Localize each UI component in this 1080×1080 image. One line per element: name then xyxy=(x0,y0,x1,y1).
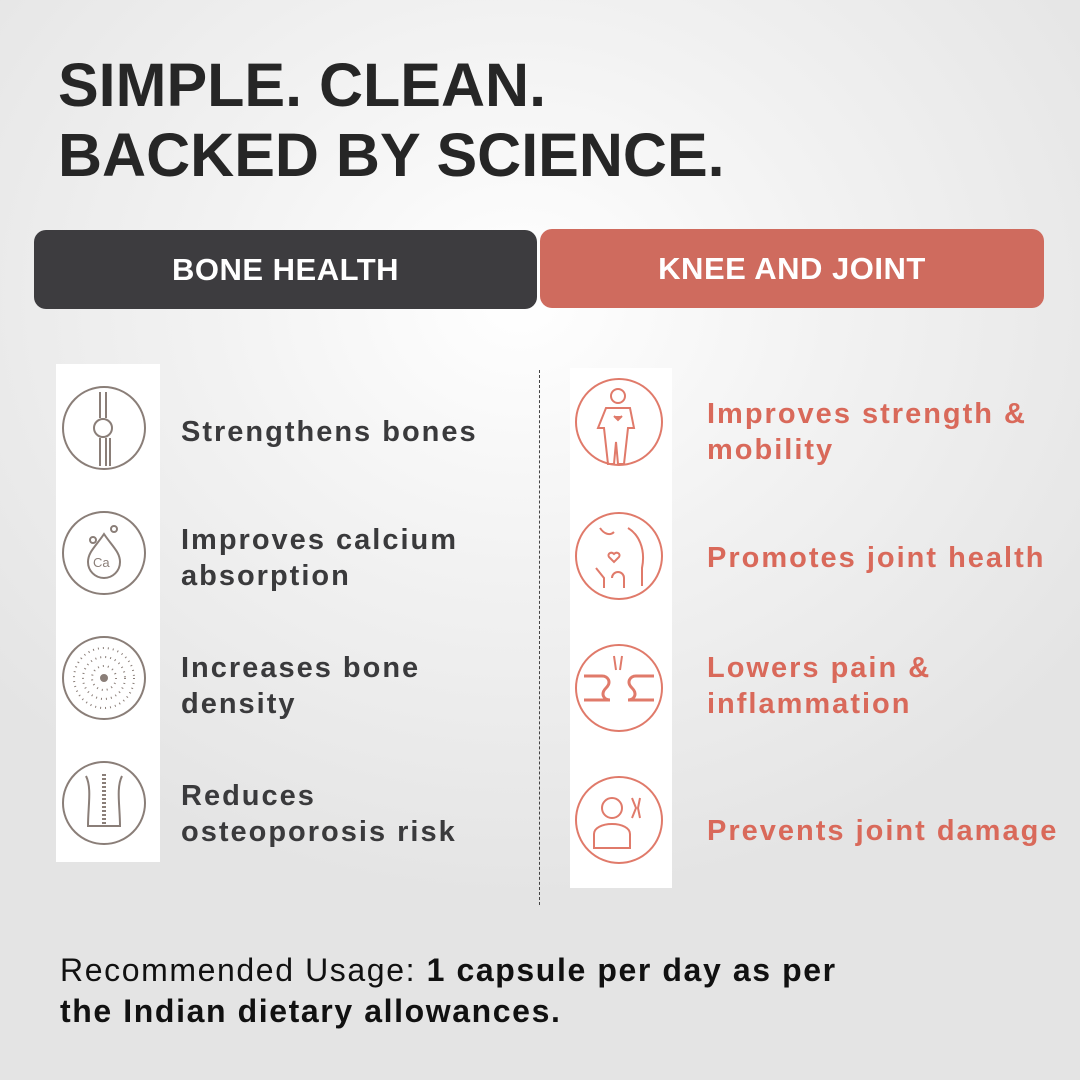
text: calcium: absorption xyxy=(181,560,351,592)
text: calcium: Improves calcium xyxy=(181,524,458,556)
tab: bone health xyxy=(34,230,537,309)
text: calcium xyxy=(181,524,458,592)
title xyxy=(58,51,725,189)
title: BACKED BY SCIENCE. xyxy=(58,121,725,189)
panel: left icon strip xyxy=(56,364,160,862)
text: strengthens bones: Strengthens bones xyxy=(181,416,478,448)
divider xyxy=(539,370,540,905)
text: strength: mobility xyxy=(707,434,834,466)
text: density xyxy=(181,652,420,720)
icon: calcium: Ca xyxy=(93,555,110,570)
icon: knee bone xyxy=(63,387,145,469)
text: joint health: Promotes joint health xyxy=(707,542,1045,574)
icon: strength xyxy=(576,379,662,465)
tab: bone health: BONE HEALTH xyxy=(172,252,399,286)
text: strength xyxy=(707,398,1027,466)
text: damage: Prevents joint damage xyxy=(707,815,1058,847)
text: osteoporosis: osteoporosis risk xyxy=(181,816,457,848)
tab: knee and joint: KNEE AND JOINT xyxy=(658,250,926,286)
text: density: density xyxy=(181,688,297,720)
recommended usage: the Indian dietary allowances. xyxy=(60,993,561,1029)
recommended usage: Recommended Usage: 1 capsule per day as per xyxy=(60,952,837,988)
tab: knee and joint xyxy=(540,229,1044,308)
icon: pain xyxy=(576,645,662,731)
text: pain xyxy=(707,652,931,720)
title: SIMPLE. CLEAN. xyxy=(58,51,546,119)
recommended usage xyxy=(60,952,837,1029)
text: pain: inflammation xyxy=(707,688,911,720)
text: osteoporosis: Reduces xyxy=(181,780,316,812)
icon: joint damage xyxy=(576,777,662,863)
text: strength: Improves strength & xyxy=(707,398,1027,430)
text: pain: Lowers pain & xyxy=(707,652,931,684)
panel: right icon strip xyxy=(570,368,672,888)
icon: spine back xyxy=(63,762,145,844)
text: osteoporosis xyxy=(181,780,457,848)
text: density: Increases bone xyxy=(181,652,420,684)
icon: density xyxy=(63,637,145,719)
icon: calcium xyxy=(63,512,145,594)
icon: joint health xyxy=(576,513,662,599)
